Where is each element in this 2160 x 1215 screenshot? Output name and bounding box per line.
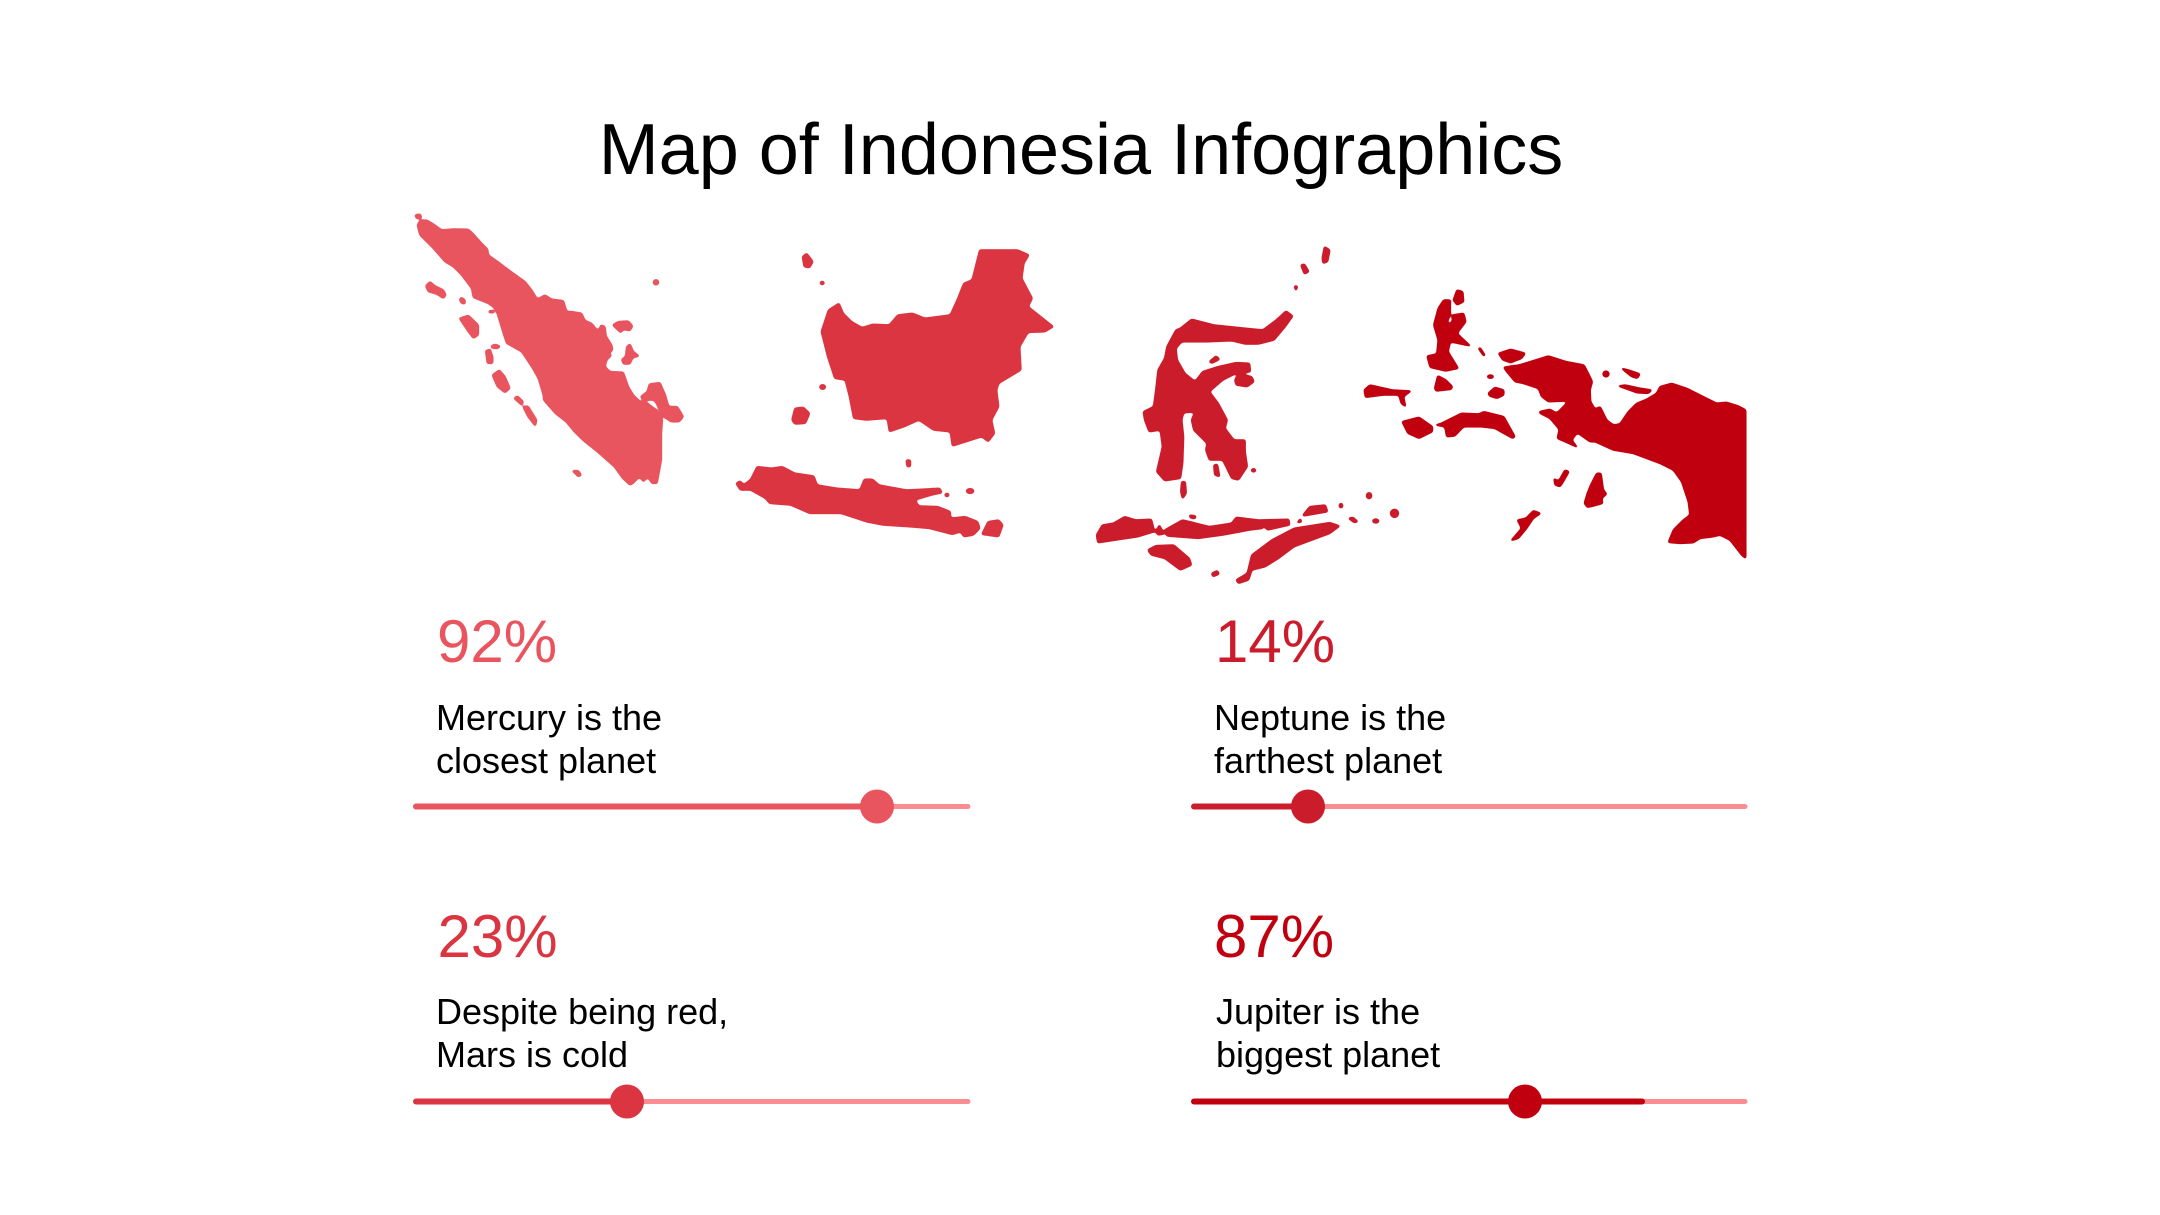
value: 87%: 87% — [1214, 903, 1334, 970]
description: Mercury: closest planet — [436, 740, 656, 781]
value: 92%: 92% — [437, 608, 557, 675]
title: Map of Indonesia Infographics — [599, 110, 1563, 190]
description: Mars: Despite being red, — [436, 991, 728, 1032]
map region: Sumatra — [415, 214, 683, 485]
map region: Maluku and Papua — [1364, 290, 1746, 558]
description: Neptune: farthest planet — [1214, 740, 1442, 781]
description: Jupiter: biggest planet — [1216, 1034, 1440, 1075]
description: Mars: Mars is cold — [436, 1034, 628, 1075]
stat panel: 87% Jupiter — [1194, 903, 1745, 1118]
stat panel: 14% Neptune — [1194, 608, 1745, 824]
map region: Sulawesi and Lesser Sunda — [1097, 247, 1399, 583]
stat panel: 92% Mercury — [416, 608, 968, 824]
slider: 14% — [1194, 790, 1745, 824]
map of Indonesia — [415, 214, 1746, 583]
slider: 87% — [1194, 1084, 1745, 1118]
value: 14%: 14% — [1215, 608, 1335, 675]
value: 23%: 23% — [438, 903, 558, 970]
description: Mercury: Mercury is the — [436, 697, 662, 738]
map region: Borneo and Java — [736, 250, 1053, 537]
description: Neptune: Neptune is the — [1214, 697, 1446, 738]
slider: 92% — [416, 790, 968, 824]
stat panel: 23% Mars — [416, 903, 968, 1118]
description: Jupiter: Jupiter is the — [1216, 991, 1420, 1032]
slider: 23% — [416, 1084, 968, 1118]
